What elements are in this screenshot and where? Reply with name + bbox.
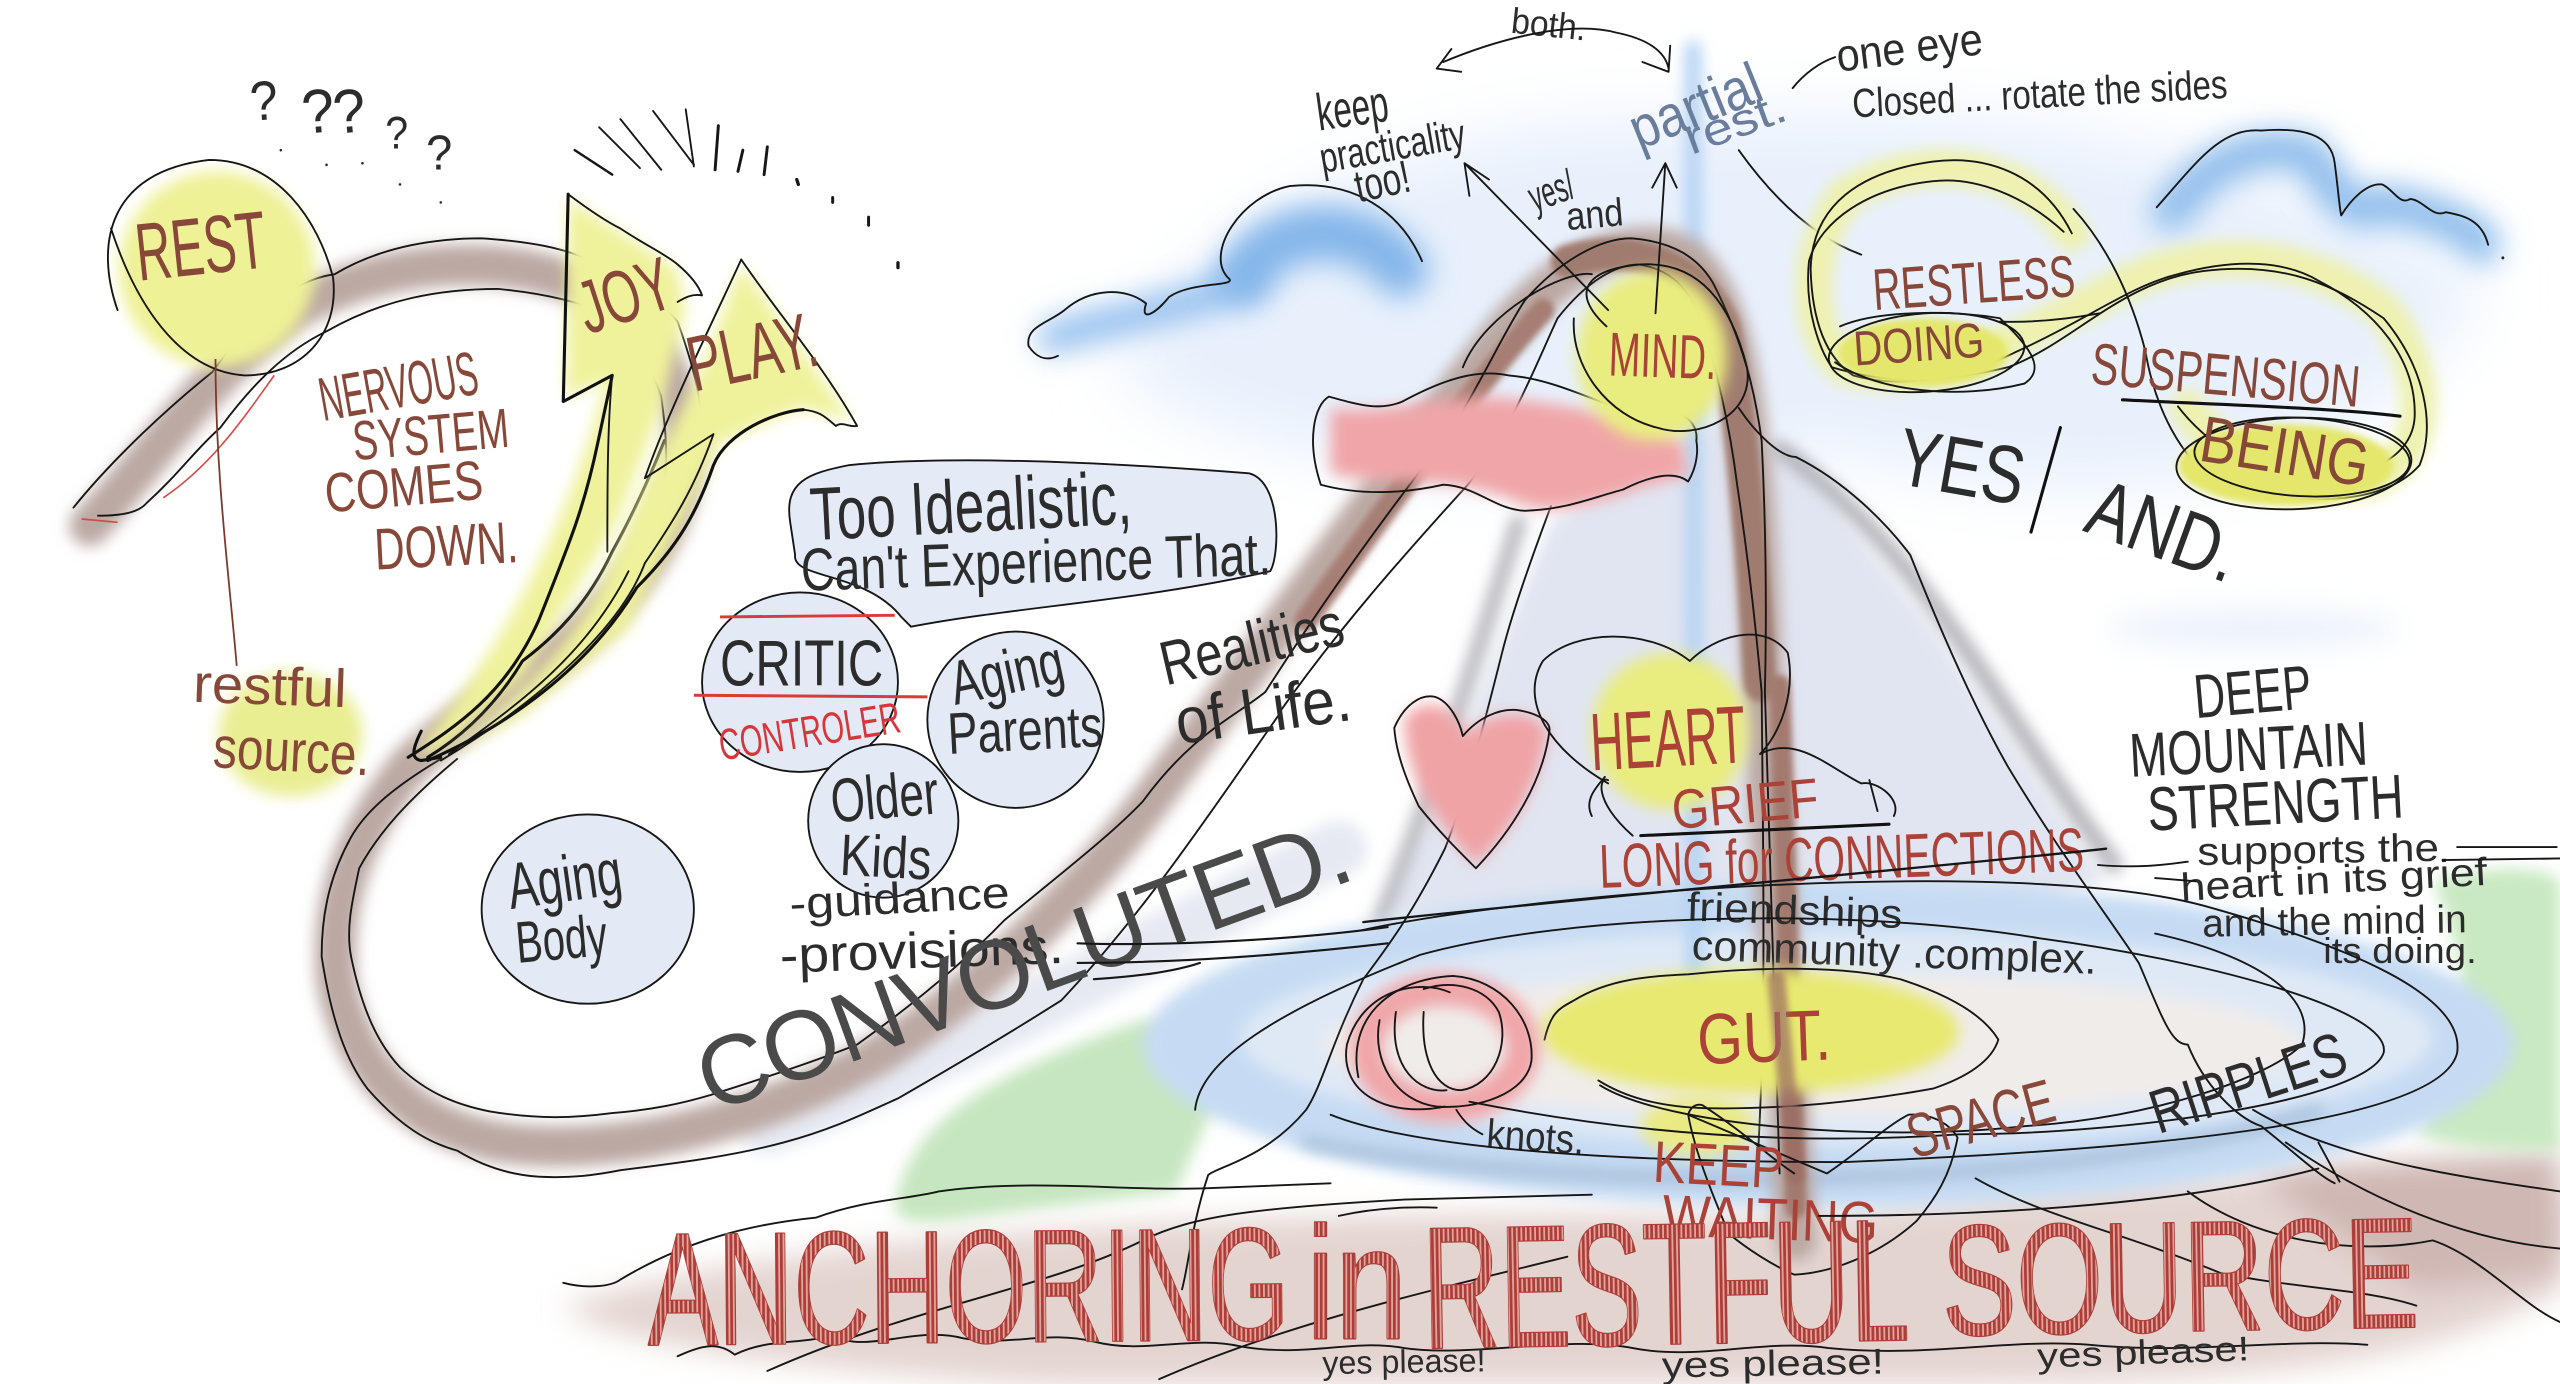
grief and connections text [1598, 766, 2097, 983]
arrows from mind [1464, 163, 1677, 313]
joy label: JOY [567, 241, 683, 350]
older kids bubble [808, 744, 958, 898]
question marks: ? [248, 69, 280, 133]
ground wash [563, 1151, 2560, 1384]
both arrow: both. [1509, 0, 1588, 48]
bubble text: Can't Experience That. [800, 519, 1272, 604]
yes and heading: YES [1891, 411, 2032, 523]
older kids bubble: Kids [839, 823, 933, 893]
both arrow [1437, 0, 1670, 72]
convoluted: CONVOLUTED. [681, 794, 1365, 1133]
yes and note: and [1564, 191, 1625, 239]
question marks [248, 69, 452, 204]
knots: knots. [1485, 1110, 1586, 1163]
aging parents bubble: Parents [946, 694, 1104, 767]
title: in [1306, 1193, 1407, 1372]
keep waiting: WAITING [1662, 1184, 1879, 1256]
ripples label: RIPPLES [2141, 1019, 2355, 1148]
grief and connections text: friendships [1686, 884, 1903, 937]
one eye closed note: Closed ... rotate the sides [1851, 61, 2229, 126]
gut [1541, 969, 1998, 1156]
sky wash [1110, 114, 2482, 648]
infinity labels [1852, 244, 2374, 501]
connector: rest to restful source [216, 359, 237, 666]
clouds: right blue cloud [2157, 130, 2504, 259]
keep waiting [1652, 1105, 1958, 1275]
ripples lines [1078, 849, 2458, 1162]
realities of life: Realities [1153, 590, 1350, 699]
road outlines [73, 238, 1780, 1177]
bubble text: Too Idealistic, [808, 455, 1133, 556]
title: ANCHORING [647, 1194, 1290, 1379]
aging body bubble: Body [513, 903, 610, 976]
clouds: left blue cloud [1028, 185, 1422, 358]
question marks: ? [299, 76, 337, 148]
bubble text [800, 455, 1272, 604]
infinity labels: DOING [1852, 314, 1986, 377]
keep practicality too note: practicality [1316, 110, 1469, 182]
restful source [192, 654, 371, 796]
infinity labels: SUSPENSION [2089, 332, 2363, 420]
critic bubble: CONTROLER [716, 693, 904, 770]
partial rest note: partial [1620, 51, 1771, 162]
keep practicality too note [1313, 75, 1469, 212]
guidance and provisions list [779, 868, 1065, 984]
mountain wash [1380, 424, 2114, 930]
question marks: ? [385, 108, 408, 159]
nervous system comes down: NERVOUS [314, 339, 483, 435]
yes and note: yes/ [1522, 161, 1581, 221]
nervous system comes down: SYSTEM [350, 397, 511, 472]
rest label: REST [131, 194, 271, 299]
speech bubble [789, 455, 1276, 627]
infinity labels: RESTLESS [1871, 244, 2077, 323]
supports note: and the mind in [2202, 898, 2467, 946]
restless and suspension infinity loop [1808, 160, 2427, 513]
aging body bubble [482, 814, 694, 1004]
grief and connections text: community .complex. [1691, 922, 2097, 983]
guidance and provisions list: -provisions. [779, 917, 1065, 984]
supports note: supports the [2197, 827, 2439, 874]
vertical blue stream [1693, 49, 1695, 1012]
brown road over gut [1776, 979, 1796, 1175]
restful source: source. [212, 715, 371, 788]
play arrow [428, 260, 857, 761]
keep waiting: KEEP [1652, 1130, 1785, 1201]
grief and connections text: LONG for CONNECTIONS [1598, 816, 2085, 902]
yes please notes: yes please! [2037, 1330, 2250, 1376]
restful source: restful [192, 654, 348, 719]
pond wash [1143, 881, 2514, 1208]
knots [1346, 976, 1586, 1163]
title: RESTFUL [1421, 1183, 1911, 1384]
keep practicality too note: keep [1313, 75, 1392, 142]
play label: PLAY. [679, 295, 825, 408]
being ellipse [2122, 400, 2413, 513]
older kids bubble: Older [828, 758, 941, 837]
realities of life: of Life. [1171, 661, 1355, 758]
mind circle [1463, 264, 1748, 441]
winding road [90, 247, 1796, 1240]
realities of life [1153, 590, 1355, 758]
grass wash [895, 869, 2560, 1221]
deep mountain strength: DEEP [2191, 653, 2314, 732]
one eye closed note [1739, 13, 2229, 255]
keep practicality too note: too! [1350, 151, 1415, 212]
nervous system comes down: COMES [322, 449, 485, 524]
space label: SPACE [1899, 1067, 2062, 1172]
aging body bubble: Aging [503, 835, 626, 923]
yes and heading [1891, 411, 2252, 600]
grief and connections text: GRIEF [1669, 766, 1821, 841]
doing ellipse [1826, 307, 2100, 398]
question marks: ? [330, 76, 368, 148]
guidance and provisions list: -guidance [788, 868, 1011, 929]
ground waves [563, 1110, 2560, 1379]
supports note: heart in its grief [2179, 851, 2488, 910]
small red heart [1394, 696, 1550, 868]
yes please notes: yes please! [1322, 1341, 1486, 1381]
heart label: HEART [1588, 689, 1748, 788]
partial rest note: rest. [1677, 81, 1793, 164]
joy arrow [408, 194, 702, 761]
critic bubble: CRITIC [720, 626, 883, 699]
title [647, 1183, 2420, 1384]
rays above joy and play [575, 109, 898, 268]
infinity labels: BEING [2195, 402, 2374, 501]
aging parents bubble: Aging [944, 628, 1070, 719]
question marks: ? [426, 127, 452, 181]
deep mountain strength: STRENGTH [2146, 762, 2405, 845]
convoluted path wash [767, 849, 1339, 1126]
yes and note [1522, 161, 1625, 239]
gut label: GUT. [1696, 995, 1832, 1080]
rest circle [108, 160, 334, 375]
supports note: its doing. [2323, 930, 2477, 971]
one eye closed note: one eye [1833, 13, 1985, 82]
mountain outlines [1182, 408, 2335, 1289]
yes and heading: AND. [2075, 462, 2252, 600]
yes please notes [1322, 1330, 2250, 1384]
aging parents bubble [927, 628, 1104, 808]
deep mountain strength: MOUNTAIN [2128, 709, 2369, 791]
deep mountain strength [2128, 653, 2405, 845]
red cloud [1313, 373, 1697, 511]
supports note [2098, 827, 2560, 971]
heart section [1535, 635, 1895, 836]
nervous system comes down [314, 339, 520, 583]
nervous system comes down: DOWN. [373, 510, 520, 583]
critic bubble [694, 592, 927, 772]
mind label: MIND. [1608, 320, 1718, 393]
